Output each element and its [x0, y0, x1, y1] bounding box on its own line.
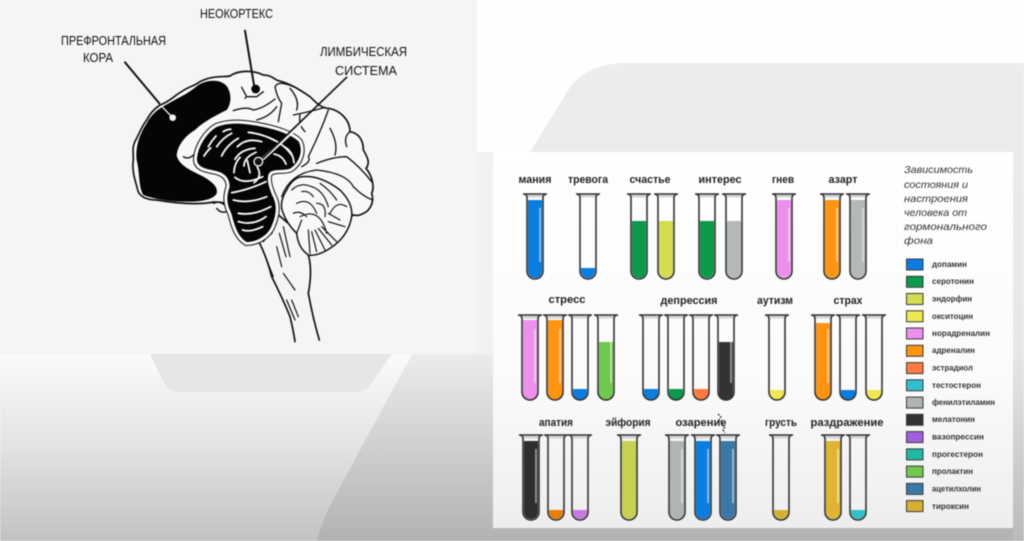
- tube group: страх: [811, 295, 886, 400]
- legend: [906, 259, 995, 512]
- brain illustration: [125, 31, 373, 342]
- tube group: гнев: гнев: [772, 174, 794, 186]
- label: лимбическая система: СИСТЕМА: [335, 64, 398, 78]
- legend: мелатонин: [932, 415, 975, 424]
- tube group: апатия: [519, 417, 592, 520]
- legend: эндорфин: [932, 294, 972, 304]
- tube group: гнев: [772, 174, 796, 279]
- tube group: грусть: грусть: [765, 417, 797, 429]
- legend heading: фона: [904, 235, 933, 247]
- legend heading: [904, 164, 987, 247]
- limbic system black area: [197, 124, 300, 242]
- legend: ацетилхолин: [932, 484, 981, 494]
- tube group: апатия: апатия: [539, 417, 573, 429]
- label: префронтальная кора: ПРЕФРОНТАЛЬНАЯ: [61, 33, 166, 48]
- panel: hormone test tubes chart: [493, 152, 1013, 528]
- legend: эстрадиол: [932, 364, 973, 372]
- brainstem folds: [263, 227, 298, 320]
- tube group: тревога: тревога: [568, 174, 609, 186]
- cerebellum folds: [292, 183, 347, 253]
- label: неокортекс: НЕОКОРТЕКС: [200, 6, 273, 21]
- legend: тестостерон: [932, 381, 981, 390]
- legend: фенилэтиламин: [932, 398, 995, 407]
- legend heading: гормонального: [904, 221, 987, 233]
- prefrontal cortex black area: [136, 81, 230, 202]
- tube group: депрессия: депрессия: [660, 295, 718, 307]
- label: лимбическая система: ЛИМБИЧЕСКАЯ: [320, 44, 407, 59]
- pointer: prefrontal cortex: [125, 62, 176, 121]
- legend: прогестерон: [932, 450, 983, 459]
- legend: серотонин: [932, 277, 974, 286]
- tube group: мания: мания: [518, 174, 552, 186]
- tube group: раздражение: раздражение: [810, 417, 884, 429]
- tube group: стресс: стресс: [548, 294, 586, 306]
- legend heading: состояния и: [904, 179, 968, 191]
- tube group: счастье: счастье: [630, 174, 670, 186]
- legend: норадреналин: [932, 329, 990, 338]
- tube group: аутизм: [757, 295, 793, 400]
- tube group: озарение: озарение: [676, 417, 726, 429]
- tube group: мания: [518, 174, 552, 279]
- label: лимбическая система: [320, 44, 407, 78]
- icon: mouse cursor artifact: [718, 414, 725, 433]
- legend: допамин: [932, 260, 967, 269]
- tube group: грусть: [765, 417, 797, 520]
- tube group: страх: страх: [834, 295, 863, 307]
- tube group: эйфория: эйфория: [606, 417, 650, 429]
- pointer: limbic system: [254, 77, 347, 166]
- legend heading: человека от: [904, 207, 967, 219]
- tube group: озарение: [665, 417, 740, 520]
- cerebrum outline: [133, 71, 373, 242]
- tube group: депрессия: [639, 295, 738, 400]
- tube group: интерес: [695, 174, 746, 279]
- legend: пролактин: [932, 467, 973, 476]
- legend heading: Зависимость: [904, 164, 973, 176]
- legend: тироксин: [932, 502, 969, 511]
- tube group: азарт: [820, 174, 870, 279]
- cortex folds: [183, 83, 373, 212]
- tube group: эйфория: [606, 417, 650, 520]
- brainstem: [258, 241, 319, 342]
- legend: окситоцин: [932, 312, 973, 321]
- tube group: счастье: [627, 174, 678, 279]
- legend: адреналин: [932, 346, 975, 355]
- legend heading: настроения: [904, 193, 968, 205]
- tube group: аутизм: аутизм: [757, 295, 793, 307]
- tube group: азарт: азарт: [828, 174, 858, 186]
- pointer: neocortex: [245, 31, 260, 93]
- tube group: тревога: [568, 174, 609, 279]
- legend: вазопрессин: [932, 432, 984, 442]
- label: префронтальная кора: КОРА: [83, 50, 113, 65]
- tube group: интерес: интерес: [698, 174, 742, 186]
- label: префронтальная кора: [61, 33, 166, 65]
- tube group: раздражение: [810, 417, 884, 520]
- tube group: стресс: [518, 294, 618, 400]
- cerebellum: [281, 176, 352, 255]
- panel: brain diagram: [0, 0, 477, 354]
